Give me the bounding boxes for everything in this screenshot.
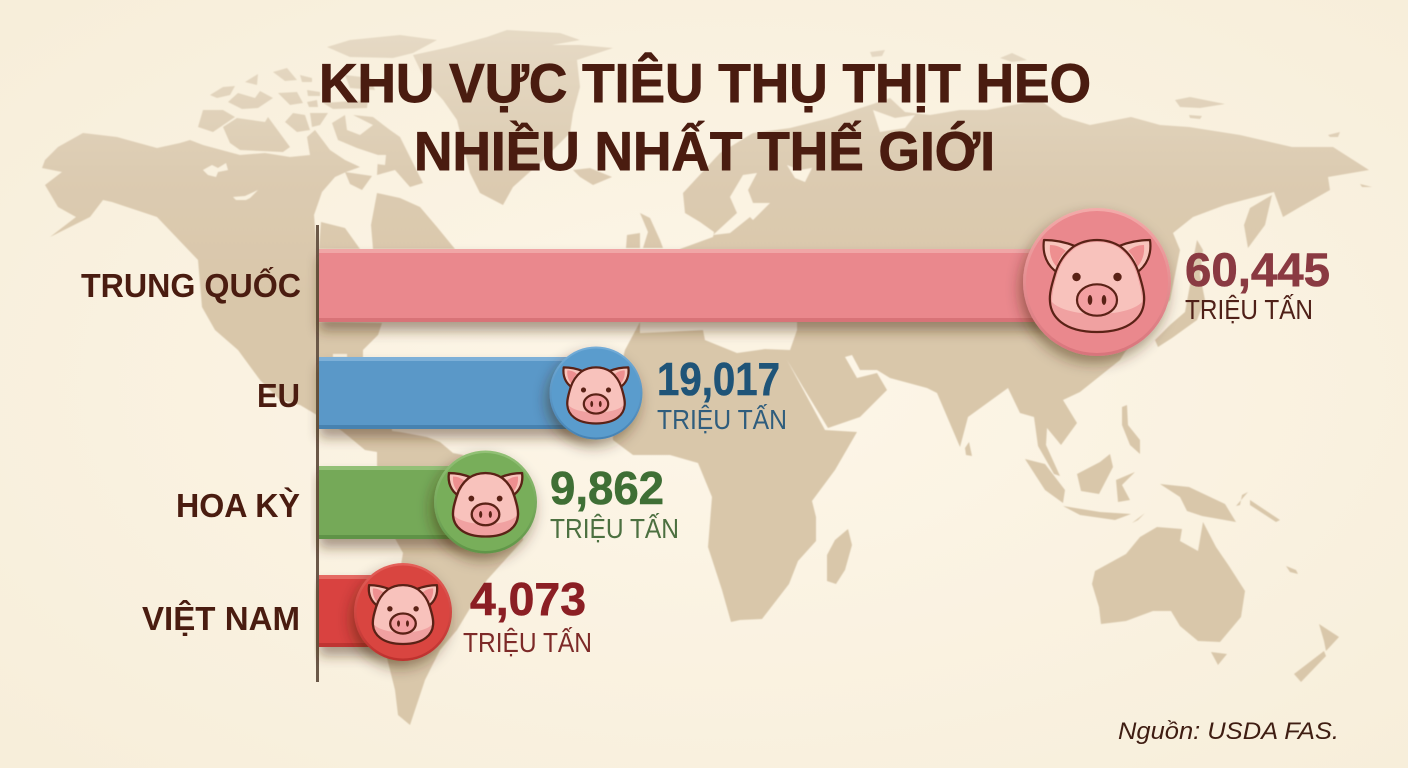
map: Japan and Sakhalin [1155,195,1272,347]
value: 60,445: 60,445 [1185,243,1330,296]
value: 9,862: 9,862 [550,462,664,514]
label: Trung Quốc: TRUNG QUỐC [81,266,301,304]
map: eastern Canada [319,172,455,249]
value: 19,017: 19,017 [657,353,780,405]
icon: pig badge Hoa Kỳ [434,450,537,554]
axis line [316,225,319,682]
row: Việt Nam [142,563,592,661]
map: White Sea [787,110,915,182]
map: British Isles [626,213,663,248]
row: Trung Quốc [81,208,1330,356]
row: EU [257,346,787,440]
unit: TRIỆU TẤN [550,513,679,544]
icon: pig badge Trung Quốc [1023,208,1171,356]
map: lakes [203,155,386,357]
map: South-East Asia islands [1025,405,1280,523]
unit: TRIỆU TẤN [1185,294,1313,325]
title line 2: NHIỀU NHẤT THẾ GIỚI [414,120,995,182]
map: North America [42,130,523,725]
bar: Hoa Kỳ [319,466,489,539]
map: New Zealand [1294,624,1339,682]
label: Việt Nam: VIỆT NAM [142,600,300,637]
icon: pig badge Việt Nam [354,563,452,661]
map: Baltic Sea [713,173,770,235]
label: EU: EU [257,377,300,414]
map: Eurasia and Africa [612,98,1369,622]
bar: Trung Quốc [319,249,1049,322]
label: Hoa Kỳ: HOA KỲ [176,487,300,524]
row: Hoa Kỳ [176,450,679,554]
map: Greenland [413,30,613,205]
map: Canadian Arctic islands [198,68,423,187]
map: Madagascar and Sri Lanka [827,442,972,584]
icon: pig badge EU [550,346,642,440]
unit: TRIỆU TẤN [657,404,787,435]
map: Iceland [573,168,612,185]
unit: TRIỆU TẤN [463,627,592,658]
map: Australia [1092,522,1245,665]
title [319,52,1091,182]
map: Mediterranean Sea [640,322,797,353]
value: 4,073: 4,073 [470,573,586,625]
title line 1: KHU VỰC TIÊU THỤ THỊT HEO [319,52,1091,114]
bar: EU [319,357,594,429]
map: Arctic and Pacific small islands [870,50,1372,574]
bar: Việt Nam [319,575,404,647]
map: Ellesmere [327,35,437,58]
source note: Nguồn: USDA FAS. [1118,718,1339,745]
